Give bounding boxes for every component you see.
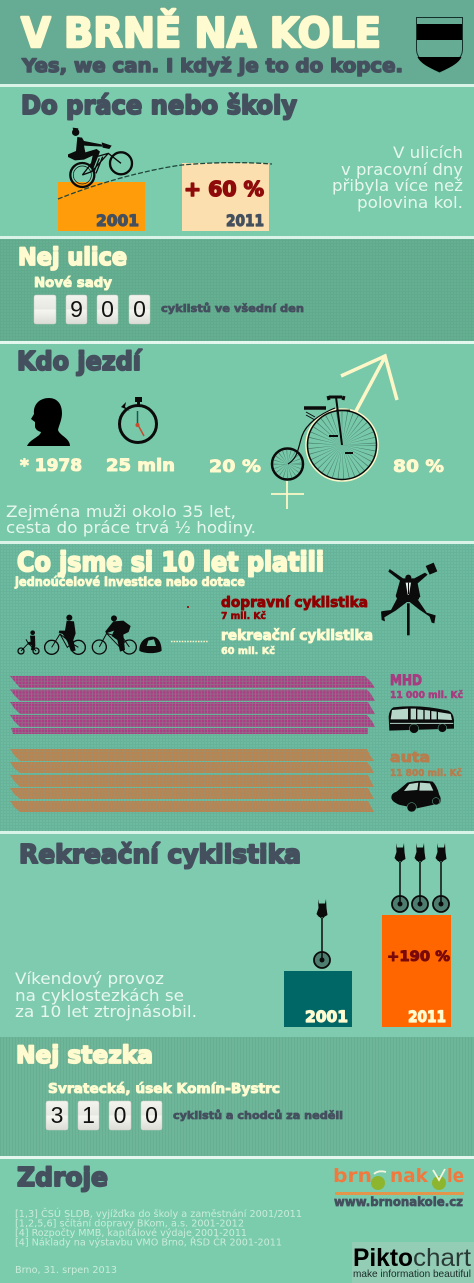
text block: na cyklostezkách se: [15, 986, 184, 1005]
text block: v pracovní dny: [341, 160, 463, 179]
panel: busiest street: [18, 243, 304, 324]
icon: male symbol arrow: [341, 356, 397, 413]
icon: cyclist on bike: [68, 128, 132, 187]
dashed growth curve: [58, 163, 272, 199]
logo: Piktochart: make information beautiful: [353, 1268, 471, 1280]
icon: unicycle cat 2011 middle: [412, 843, 428, 912]
icon: car: [391, 781, 441, 812]
source list: [4] Náklady na výstavbu VMO Brno, ŘSD ČR 2001-2011: [15, 1236, 282, 1248]
label: recreational cycling: [221, 628, 373, 657]
logo: brnonakole: nak: [390, 1165, 428, 1187]
label: public transport: MHD: [390, 673, 422, 689]
icon: bus: [389, 706, 454, 733]
logo: brnonakole: www.brnonakole.cz: [334, 1195, 463, 1209]
icon: unicycle cat 2011 right: [433, 843, 449, 912]
header: [21, 9, 463, 77]
label: recreational cycling: 60 mil. Kč: [221, 645, 275, 657]
flip counter: 900: 0: [101, 296, 114, 322]
label: public transport: [390, 673, 463, 701]
bar: 2011: +190 %: [387, 949, 450, 965]
text block: přibyla více než: [332, 176, 463, 195]
icon: male head silhouette: [27, 398, 70, 446]
icon: stopwatch: [120, 397, 156, 442]
flip counter: 900: 9: [70, 296, 83, 322]
street name: Nové sady: [34, 276, 113, 291]
panel: commute: [21, 91, 463, 231]
logo: brnonakole: brn: [333, 1165, 372, 1187]
panel: recreational cycling: [15, 840, 451, 1027]
icon: unicycle cat 2011 left: [392, 843, 408, 912]
caption: cyklistů ve všední den: [161, 302, 304, 315]
flip counter: 3100: 1: [82, 1102, 95, 1128]
flip counter: 900: [34, 295, 150, 324]
text block: V ulicích: [393, 143, 463, 162]
logo: Piktochart: Pikto: [353, 1244, 413, 1272]
date: Brno, 31. srpen 2013: [15, 1265, 117, 1276]
label: transport cycling: [221, 595, 368, 622]
women share: 20 %: [209, 457, 261, 477]
title: V BRNĚ NA KOLE: [21, 9, 381, 57]
flip counter: 3100: 0: [145, 1102, 158, 1128]
bar: 2011: 2011: [226, 211, 264, 230]
heading: Co jsme si 10 let platili: [17, 547, 324, 578]
panel: spending: [10, 547, 463, 812]
heading: Do práce nebo školy: [21, 91, 297, 121]
birth year: * 1978: [20, 456, 82, 476]
label: public transport: 11 000 mil. Kč: [390, 689, 463, 701]
source list: [15, 1207, 302, 1248]
bar: 2011: [182, 163, 269, 231]
logo: brnonakole: [333, 1165, 464, 1209]
chart: public transport unit grid: [10, 676, 375, 734]
label: cars: auta: [390, 750, 430, 766]
label: transport cycling: dopravní cyklistika: [221, 595, 368, 611]
caption: cyklistů a chodců za neděli: [173, 1109, 343, 1122]
subheading: jednoúčelové investice nebo dotace: [14, 575, 245, 589]
text block: [6, 502, 256, 537]
bar: 2001: 2001: [305, 1007, 348, 1026]
bar: 2001: [58, 182, 145, 231]
commute time: 25 min: [106, 456, 175, 476]
label: transport cycling: 7 mil. Kč: [221, 610, 266, 622]
flip counter: 3100: 3: [51, 1102, 63, 1128]
path name: Svratecká, úsek Komín-Bystrc: [48, 1082, 280, 1097]
logo: Piktochart: [352, 1242, 474, 1283]
label: cars: 11 800 mil. Kč: [390, 767, 462, 779]
bar: 2011: + 60 %: [184, 177, 264, 201]
bar: 2001: 2001: [96, 211, 139, 230]
text block: cesta do práce trvá ½ hodiny.: [6, 518, 256, 537]
label: recreational cycling: rekreační cyklistika: [221, 628, 373, 644]
flip counter: 3100: [46, 1101, 162, 1130]
heading: Kdo jezdí: [17, 347, 143, 377]
text block: [15, 969, 197, 1021]
text block: Zejména muži okolo 35 let,: [6, 502, 236, 521]
heading: Rekreační cyklistika: [19, 840, 301, 870]
icon: unicycle cat 2001: [314, 899, 330, 968]
bar: 2001: [284, 971, 352, 1027]
source list: [4] Rozpočty MMB, kapitálové výdaje 2001-2011: [15, 1227, 247, 1239]
subtitle: Yes, we can. I když je to do kopce.: [21, 55, 403, 77]
unit: transport cycling dot: [187, 606, 189, 608]
heading: Zdroje: [17, 1163, 108, 1193]
label: cars: [390, 750, 462, 779]
unit: recreational cycling dots: [171, 640, 208, 642]
text block: [332, 143, 463, 212]
panel: sources: [15, 1163, 474, 1283]
men share: 80 %: [393, 457, 444, 477]
text block: za 10 let ztrojnásobil.: [15, 1002, 197, 1021]
icon: Brno coat of arms: [416, 18, 462, 72]
heading: Nej stezka: [16, 1041, 153, 1069]
source list: [1,3] ČSÚ SLDB, vyjížďka do školy a zaměstnání 2001/2011: [15, 1207, 302, 1220]
logo: Piktochart: chart: [413, 1244, 471, 1272]
flip counter: 900: 0: [133, 296, 146, 322]
panel: who rides: [6, 347, 444, 537]
text block: Víkendový provoz: [15, 969, 164, 988]
chart: cars unit grid: [10, 749, 374, 812]
icon: penny-farthing bicycle: [272, 396, 378, 481]
flip counter: 3100: 0: [114, 1102, 126, 1128]
text block: polovina kol.: [357, 193, 463, 212]
panel: busiest path: [16, 1041, 343, 1130]
bar: 2011: [382, 915, 451, 1027]
source list: [1,2,5,6] sčítání dopravy BKom, a.s. 2001-2012: [15, 1218, 244, 1230]
icon: cycling family: [18, 615, 162, 654]
logo: brnonakole: le: [447, 1165, 464, 1187]
icon: female symbol cross: [271, 481, 304, 509]
icon: jumping businessman on bike: [381, 563, 437, 635]
bar: 2011: 2011: [408, 1007, 446, 1026]
heading: Nej ulice: [18, 243, 127, 271]
